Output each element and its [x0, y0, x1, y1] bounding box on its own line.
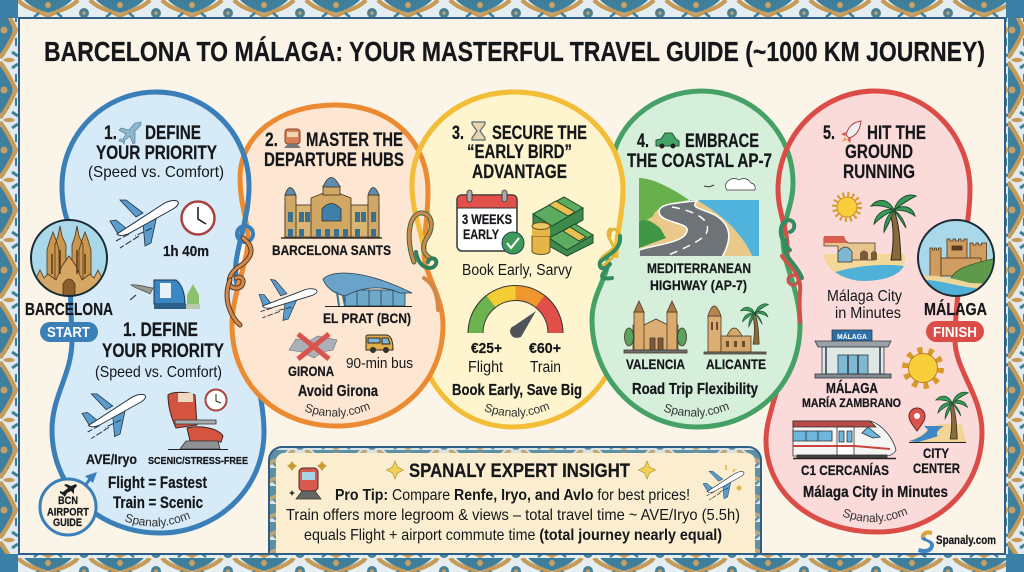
pro tip text: Pro Tip: Compare Renfe, Iryo, and Avlo for best prices! — [335, 487, 690, 504]
heading 3 — [452, 122, 587, 183]
second heading: YOUR PRIORITY — [102, 341, 224, 362]
heading 3: SECURE THE — [492, 123, 587, 144]
labels: city center: CENTER — [913, 460, 960, 476]
icon: calendar: 3 WEEKS — [462, 212, 512, 227]
panel 4 outline: green — [592, 91, 800, 427]
caption — [827, 288, 902, 322]
panel: Spanaly expert insight — [268, 446, 762, 566]
icon: beach village — [823, 236, 905, 281]
labels: cities — [626, 356, 766, 372]
flight time: 1h 40m — [163, 244, 209, 260]
heading 4: THE COASTAL AP-7 — [627, 151, 772, 172]
second heading — [95, 320, 224, 381]
heading 5: RUNNING — [843, 162, 915, 183]
heading 5: HIT THE — [867, 123, 926, 144]
takeaway: Avoid Girona — [298, 383, 378, 400]
badge: BCN airport guide: AIRPORT — [47, 506, 89, 518]
icon: plane to El Prat — [254, 278, 317, 328]
takeaway: Book Early, Save Big — [452, 382, 582, 399]
heading 1: (Speed vs. Comfort) — [88, 164, 224, 181]
heading 5: 5. — [823, 123, 835, 144]
heading 4 — [627, 131, 772, 172]
heading 4: 4. — [637, 131, 649, 152]
icon: airplane two — [82, 394, 146, 438]
watermark: Spanaly.com — [664, 404, 730, 419]
heading 5: GROUND — [845, 142, 913, 163]
labels: cities: VALENCIA — [626, 356, 685, 372]
icon: Barcelona Sants station — [281, 178, 382, 238]
heading 1: DEFINE — [145, 123, 201, 144]
watermark: Spanaly.com — [484, 404, 550, 419]
takeaway: Road Trip Flexibility — [632, 381, 758, 398]
takeaway: Málaga City in Minutes — [803, 484, 948, 501]
second heading: 1. DEFINE — [123, 320, 198, 341]
label: station: MÁLAGA — [826, 380, 878, 397]
icon: palm tree — [871, 195, 916, 260]
heading 2 — [264, 129, 404, 171]
logo: Spanaly.com: Spanaly.com — [936, 533, 996, 547]
panel 5 outline: red — [766, 91, 982, 532]
price labels: Train — [530, 359, 561, 376]
labels: city center: CITY — [923, 445, 950, 461]
heading 1 — [88, 122, 224, 181]
panel 2 outline: orange — [232, 105, 443, 426]
label: El Prat: EL PRAT (BCN) — [323, 310, 411, 326]
icon: city center pin and palm — [909, 392, 968, 442]
panel 2 content: departure hubs — [258, 128, 413, 419]
label: C1 Cercanías: C1 CERCANÍAS — [801, 462, 889, 478]
price labels: Flight — [468, 359, 503, 376]
illustration: coastal road — [639, 178, 760, 257]
watermark: Spanaly.com — [305, 404, 370, 419]
caption: in Minutes — [835, 305, 901, 322]
mode labels: SCENIC/STRESS-FREE — [148, 455, 248, 467]
mode labels — [86, 451, 248, 467]
label: Mediterranean highway — [647, 261, 751, 293]
heading 2: DEPARTURE HUBS — [264, 150, 404, 171]
heading 2: 2. — [265, 130, 278, 151]
label: Girona: GIRONA — [288, 363, 334, 379]
panel 5 content: hit the ground running — [792, 120, 969, 524]
bottom border strip over insight panel — [18, 553, 1006, 572]
price labels: €25+ — [471, 340, 502, 357]
icon: C1 train — [793, 421, 896, 458]
summary — [108, 474, 207, 512]
panel 1 content: define your priority — [82, 122, 248, 528]
icon: airport train — [130, 280, 200, 309]
second heading: (Speed vs. Comfort) — [95, 364, 222, 381]
label: Mediterranean highway: HIGHWAY (AP-7) — [650, 278, 747, 293]
label: Barcelona: BARCELONA — [25, 299, 113, 319]
panel 4 content: coastal AP-7 — [624, 131, 772, 419]
knot: blue and orange rope — [227, 226, 253, 325]
icon: El Prat terminal — [323, 273, 412, 306]
logo: Spanaly.com — [918, 531, 996, 553]
panel 3 content: early bird — [452, 121, 594, 419]
label: Málaga: MÁLAGA — [924, 298, 987, 319]
badge: BCN airport guide: BCN — [58, 495, 78, 507]
icon: airplane — [110, 200, 178, 248]
icon: Alcazaba castle — [917, 219, 995, 297]
labels: city center — [913, 445, 960, 476]
icon: calendar: EARLY — [463, 227, 499, 242]
badge: BCN airport guide — [40, 472, 97, 535]
price labels — [468, 340, 561, 376]
heading 2: MASTER THE — [306, 130, 403, 151]
heading 5 — [823, 121, 926, 183]
summary: Flight = Fastest — [108, 474, 207, 492]
start marker: Barcelona — [25, 220, 113, 342]
caption: Book Early, Sarvy — [462, 262, 572, 279]
watermark: Spanaly.com — [842, 508, 908, 524]
label: station: MARÍA ZAMBRANO — [802, 397, 901, 410]
label: bus time: 90-min bus — [346, 356, 413, 372]
badge: BCN airport guide: GUIDE — [53, 517, 82, 529]
icon: bus — [366, 335, 393, 352]
icon: María Zambrano station — [815, 330, 891, 378]
watermark: Spanaly.com — [125, 513, 190, 528]
heading 1: YOUR PRIORITY — [96, 143, 217, 164]
labels: cities: ALICANTE — [706, 356, 766, 372]
knot: orange and yellow rope — [409, 213, 438, 310]
label: station — [802, 380, 901, 410]
badge: start: START — [47, 324, 90, 341]
heading: expert insight: SPANALY EXPERT INSIGHT — [409, 460, 630, 482]
comparison text — [286, 507, 740, 544]
label: Barcelona Sants: BARCELONA SANTS — [272, 243, 391, 258]
icon: cash stacks — [532, 197, 593, 256]
heading 1: 1. — [104, 123, 117, 144]
icon: María Zambrano station: MÁLAGA — [837, 332, 868, 341]
caption: Málaga City — [827, 288, 902, 305]
comparison text: Train offers more legroom & views – total travel time ~ AVE/Iryo (5.5h) — [286, 507, 740, 524]
knot: yellow and green rope — [600, 229, 620, 279]
heading 3: ADVANTAGE — [472, 162, 567, 183]
price labels: €60+ — [529, 340, 561, 357]
icon: clock — [182, 202, 214, 234]
label: Mediterranean highway: MEDITERRANEAN — [647, 261, 751, 276]
heading 3: “EARLY BIRD” — [467, 142, 572, 163]
gauge — [476, 293, 556, 338]
panel 3 outline: yellow — [412, 92, 623, 427]
knot: green and red rope — [781, 220, 802, 322]
badge: finish: FINISH — [933, 324, 977, 341]
icon: Valencia cathedral — [624, 301, 687, 353]
panel 1 outline: blue — [52, 92, 264, 533]
summary: Train = Scenic — [113, 494, 203, 512]
heading 4: EMBRACE — [685, 131, 759, 152]
heading 3: 3. — [452, 123, 464, 144]
icon: Alicante church and palm — [704, 304, 769, 354]
icon: calendar — [457, 190, 524, 254]
icon: train seat — [168, 390, 228, 450]
icon: train with sparkles — [287, 461, 327, 499]
finish marker: Málaga — [915, 220, 1000, 342]
icon: Sagrada Familia — [31, 220, 107, 298]
icon: sun — [834, 194, 860, 220]
icon: Girona crossed out — [289, 334, 337, 359]
mode labels: AVE/Iryo — [86, 451, 137, 467]
icon: plane with sparkles — [703, 465, 744, 500]
comparison text: equals Flight + airport commute time (total journey nearly equal) — [304, 527, 722, 544]
icon: large sun — [906, 350, 940, 386]
